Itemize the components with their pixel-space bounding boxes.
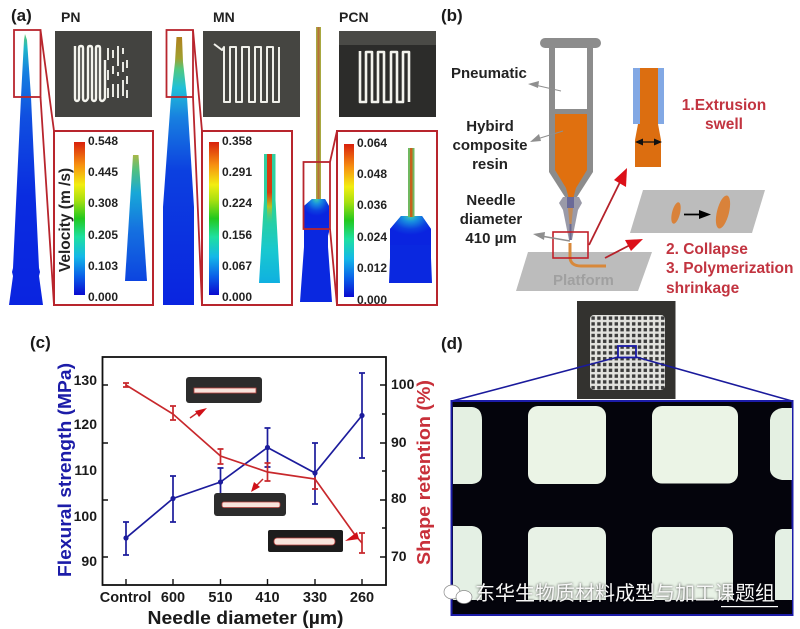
x axis labels: 330	[303, 590, 327, 606]
axis title: Needle diameter: Needle diameter (µm)	[148, 608, 344, 628]
text: Needle diameter: Needle	[466, 192, 516, 209]
text: Hybird composite resin: resin	[472, 156, 508, 173]
inset: PN velocity	[54, 131, 153, 305]
photo: printed lattice	[577, 301, 676, 399]
red series: shape retention	[123, 383, 365, 553]
panel: b - printing schematic	[441, 6, 793, 297]
right axis labels: 70	[391, 548, 407, 564]
axis title: Flexural strength: Flexural strength (MPa)	[55, 363, 75, 577]
text: collapse and shrinkage: shrinkage	[666, 280, 740, 297]
watermark text: 东华生物质材料成型与加工课题组	[475, 577, 775, 606]
inset: PCN velocity	[337, 131, 437, 307]
blue series: flexural strength	[123, 373, 365, 555]
PN full nozzle	[9, 34, 43, 305]
label: MN: MN	[213, 9, 235, 25]
PCN full nozzle	[300, 27, 332, 302]
MN full nozzle	[163, 37, 194, 305]
inset photo: 600 µm sample	[186, 377, 262, 403]
platform: Platform	[553, 272, 614, 289]
panel: d - printed lattice	[441, 301, 792, 615]
x axis labels: 510	[208, 590, 233, 606]
inset: PN velocity: 0.548	[88, 134, 118, 148]
inset: PCN velocity: 0.036	[357, 198, 387, 212]
x axis labels: 600	[161, 590, 185, 606]
photo: MN printed serpentine	[203, 31, 300, 117]
label: PCN: PCN	[339, 9, 369, 25]
inset: MN velocity: 0.067	[222, 259, 252, 273]
inset: PN velocity: 0.445	[88, 165, 118, 179]
x axis labels: 260	[350, 590, 374, 606]
left axis labels: 90	[81, 553, 97, 569]
inset: MN velocity: 0.358	[222, 134, 252, 148]
label: (c): (c)	[30, 333, 51, 352]
right axis labels: 90	[391, 434, 407, 450]
left axis labels: 130	[74, 372, 97, 388]
text: Hybird composite resin: composite	[452, 137, 528, 154]
label: (d): (d)	[441, 334, 463, 353]
inset: PCN velocity: 0.000	[357, 293, 387, 307]
right axis labels: 80	[391, 490, 407, 506]
inset: PN velocity: 0.103	[88, 259, 118, 273]
left axis labels: 100	[74, 508, 97, 524]
red arrows	[589, 168, 643, 258]
red pointer arrows	[190, 408, 359, 541]
inset: MN velocity: 0.000	[222, 290, 252, 304]
text: collapse and shrinkage: 3. Polymerization	[666, 260, 793, 277]
text: collapse and shrinkage: 2. Collapse	[666, 241, 748, 258]
inset photo: 410 µm sample	[214, 493, 286, 516]
collapse plane	[630, 190, 765, 233]
micrograph	[452, 401, 792, 615]
blue guide lines	[452, 357, 792, 401]
label: (b): (b)	[441, 6, 463, 25]
platform	[516, 252, 652, 291]
x axis labels: Control	[100, 590, 151, 606]
left axis labels	[74, 372, 97, 569]
extruded filament	[570, 243, 606, 266]
red zoom boxes and guide lines	[14, 30, 337, 305]
text: extrusion swell: swell	[705, 116, 743, 133]
inset: PN velocity: Velocity (m /s)	[57, 168, 74, 272]
text: Needle diameter: diameter	[460, 211, 522, 228]
text: extrusion swell: 1.Extrusion	[682, 97, 766, 114]
text: Hybird composite resin: Hybird	[466, 118, 514, 135]
syringe	[540, 38, 601, 240]
label: PN: PN	[61, 9, 80, 25]
inset: MN velocity: 0.156	[222, 228, 252, 242]
right axis labels	[391, 376, 415, 564]
inset: PN velocity: 0.000	[88, 290, 118, 304]
inset: PCN velocity: 0.012	[357, 261, 387, 275]
inset: MN velocity: 0.291	[222, 165, 252, 179]
panel: c - flexural strength and shape retention chart	[30, 333, 434, 628]
label: (a): (a)	[11, 6, 32, 25]
red inset square	[553, 232, 588, 258]
text: Needle diameter: 410 µm	[465, 230, 517, 247]
inset: PN velocity: 0.205	[88, 228, 118, 242]
inset: PCN velocity: 0.024	[357, 230, 387, 244]
inset: PCN velocity: 0.048	[357, 167, 387, 181]
icon: wechat watermark	[444, 585, 472, 604]
x axis labels	[100, 590, 374, 606]
extrusion swell detail	[633, 68, 664, 167]
inset photo: 260 µm sample	[268, 530, 343, 552]
left axis labels: 120	[74, 416, 97, 432]
photo: PCN printed serpentine	[339, 31, 436, 117]
plot frame and ticks	[102, 357, 386, 585]
inset: PN velocity: 0.308	[88, 196, 118, 210]
panel: a - nozzle velocity simulations	[9, 6, 437, 307]
right axis labels: 100	[391, 376, 415, 392]
gray arrows	[528, 81, 570, 241]
inset: PCN velocity: 0.064	[357, 136, 387, 150]
x axis labels: 410	[255, 590, 280, 606]
photo: PN printed serpentine	[55, 31, 152, 117]
inset: MN velocity: 0.224	[222, 196, 252, 210]
axis title: Shape retention: Shape retention (%)	[414, 380, 434, 565]
text: Pneumatic: Pneumatic	[451, 65, 527, 82]
left axis labels: 110	[74, 462, 97, 478]
inset: MN velocity	[202, 131, 292, 305]
